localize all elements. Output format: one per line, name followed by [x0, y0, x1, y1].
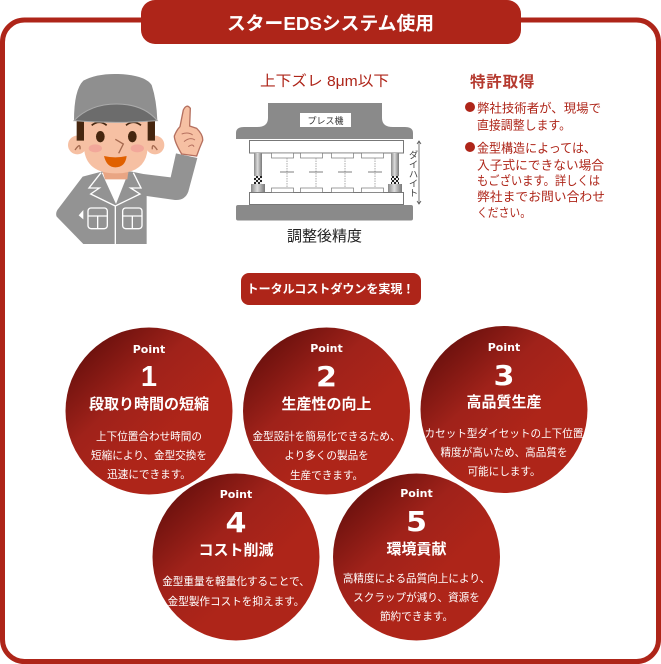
point 2 circle: Point	[310, 342, 343, 355]
lower plate	[250, 192, 404, 204]
text block: patent notes	[465, 100, 605, 220]
point 5 circle: Point	[400, 487, 433, 500]
point 5 circle	[333, 474, 500, 640]
note 1: 直接調整します。	[477, 118, 571, 132]
worker body	[56, 153, 197, 244]
point 3 circle: 可能にします。	[467, 465, 541, 478]
worker hand	[174, 106, 203, 156]
callout: total cost down: トータルコストダウンを実現！	[247, 281, 414, 296]
guide posts	[251, 153, 402, 192]
point 4 circle: 金型重量を軽量化することで、	[162, 575, 310, 588]
point 1 circle: Point	[133, 343, 165, 356]
die height arrow	[417, 141, 421, 204]
point 2 circle: より多くの製品を	[284, 449, 369, 462]
point 2 circle: 生産性の向上	[281, 395, 372, 413]
point 5 circle: 環境貢献	[386, 541, 447, 558]
die height label: ダイハイト	[406, 149, 418, 198]
icon: worker pointing up	[56, 74, 203, 244]
note 2: もございます。詳しくは	[477, 173, 600, 188]
point 5 circle: スクラップが減り、資源を	[353, 591, 480, 604]
point 1 circle: 段取り時間の短縮	[89, 395, 209, 413]
point 1 circle: 迅速にできます。	[107, 469, 191, 481]
point 2 circle	[243, 328, 410, 494]
point 3 circle: カセット型ダイセットの上下位置	[425, 427, 584, 440]
point 3 circle: 高品質生産	[466, 393, 542, 411]
diagram: press machine	[236, 103, 421, 220]
note 2: ください。	[477, 206, 531, 220]
point 3 circle: Point	[488, 341, 520, 354]
note 2: 入子式にできない場合	[477, 158, 605, 172]
press label: プレス機	[307, 115, 344, 126]
point 1 circle: 1	[141, 361, 157, 393]
upper plate	[250, 140, 404, 153]
point 5 circle: 高精度による品質向上により、	[343, 572, 490, 585]
note 2	[465, 142, 605, 220]
press label	[300, 113, 351, 127]
title banner	[141, 0, 521, 44]
heading: patent: 特許取得	[470, 72, 535, 91]
note 2: 弊社までお問い合わせ	[477, 189, 605, 204]
point 3 circle: 3	[494, 359, 514, 392]
point 4 circle: 金型製作コストを抑えます。	[168, 595, 304, 608]
point 3 circle	[420, 326, 588, 493]
worker cap	[74, 74, 157, 121]
point 3 circle: 精度が高いため、高品質を	[440, 446, 568, 459]
title banner: スターEDSシステム使用	[227, 13, 434, 34]
point 2 circle: 金型設計を簡易化できるため、	[252, 430, 401, 443]
heading: alignment accuracy: 上下ズレ 8μm以下	[260, 73, 389, 90]
point 4 circle: Point	[220, 488, 252, 501]
point 4 circle	[152, 474, 320, 640]
point 5 circle: 5	[406, 505, 427, 538]
point 1 circle: 上下位置合わせ時間の	[96, 430, 202, 443]
callout: total cost down	[241, 273, 421, 305]
point 1 circle: 短縮により、金型交換を	[91, 449, 207, 462]
point 4 circle: 4	[226, 506, 246, 539]
press upper	[236, 103, 413, 139]
note 1	[465, 100, 601, 132]
point 2 circle: 生産できます。	[290, 469, 363, 482]
point 4 circle: コスト削減	[198, 541, 274, 559]
worker head	[68, 136, 87, 154]
point 2 circle: 2	[316, 360, 337, 393]
point 1 circle	[66, 328, 232, 494]
note 1: 弊社技術者が、現場で	[477, 100, 601, 116]
dies	[272, 153, 384, 192]
caption: adjusted accuracy: 調整後精度	[287, 228, 362, 245]
note 2: 金型構造によっては、	[477, 142, 596, 156]
press lower	[236, 205, 413, 220]
point 5 circle: 節約できます。	[380, 610, 453, 623]
